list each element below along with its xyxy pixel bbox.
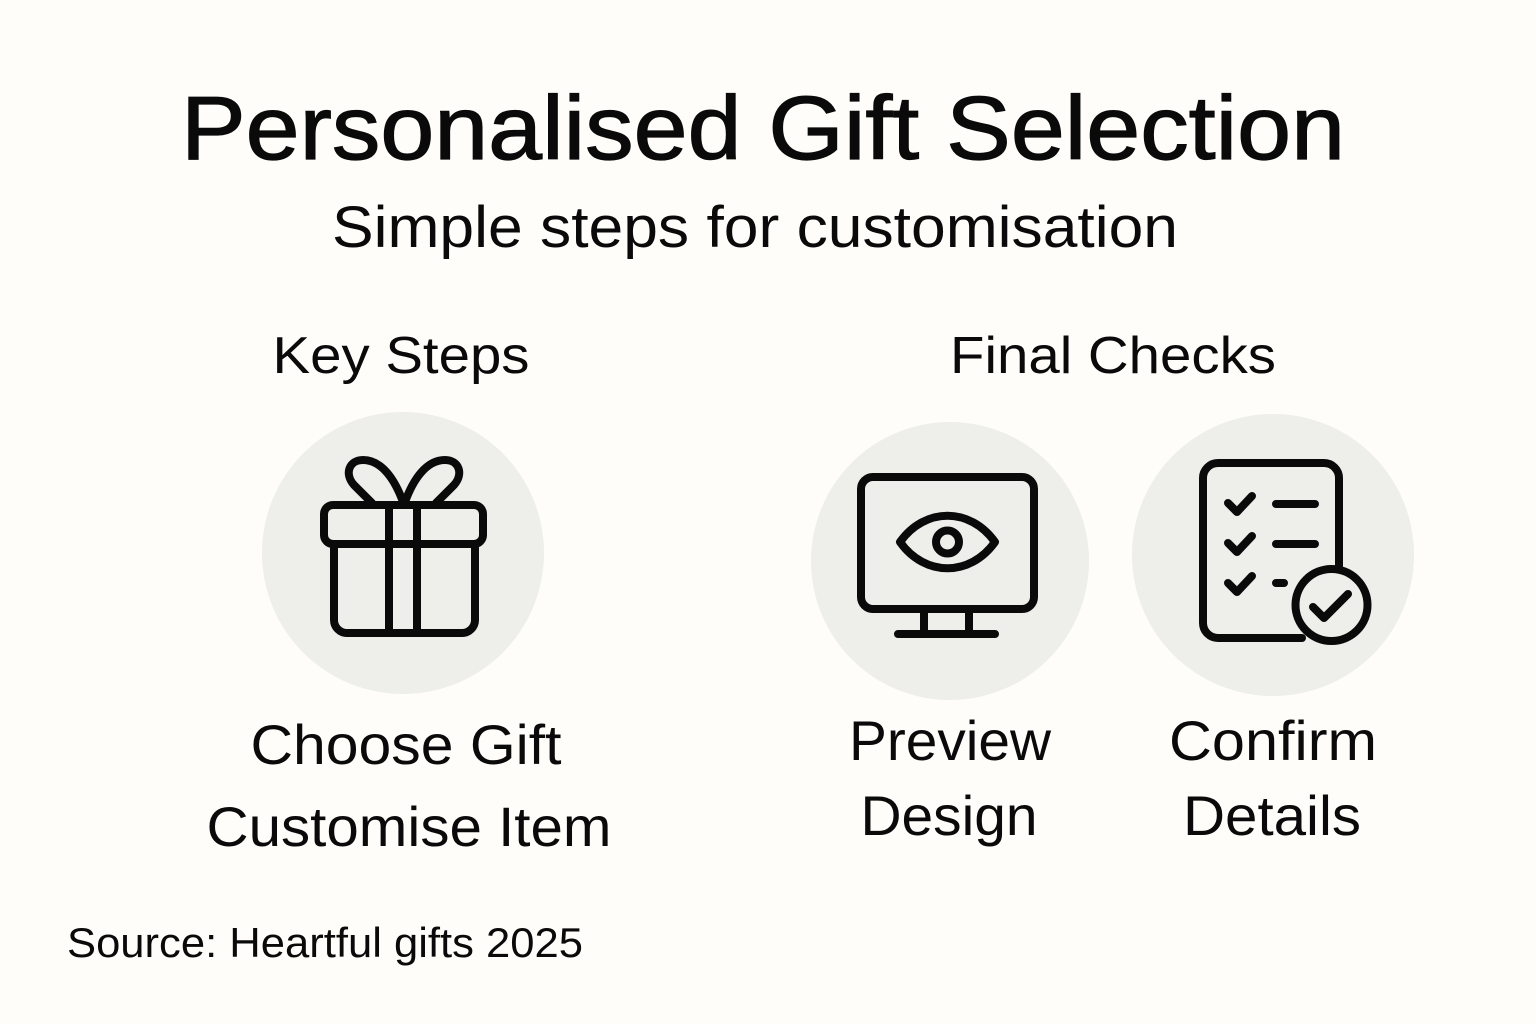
icon: gift <box>262 412 544 694</box>
label: confirm details: Details <box>1183 784 1361 847</box>
icon: checklist <box>1132 414 1414 696</box>
icon: preview monitor <box>811 422 1089 700</box>
subtitle: Simple steps for customisation <box>332 195 1178 260</box>
label: choose gift, customise item: Choose Gift <box>250 713 562 776</box>
source note: Source: Heartful gifts 2025 <box>67 919 583 966</box>
heading: key steps: Key Steps <box>272 327 530 385</box>
heading: final checks: Final Checks <box>950 327 1276 385</box>
label: preview design: Preview <box>849 709 1052 772</box>
label: confirm details: Confirm <box>1169 709 1377 772</box>
label: confirm details <box>1169 709 1377 847</box>
label: choose gift, customise item <box>206 713 612 858</box>
label: choose gift, customise item: Customise Item <box>206 795 612 858</box>
label: preview design <box>849 709 1052 847</box>
label: preview design: Design <box>860 784 1038 847</box>
title: Personalised Gift Selection <box>181 79 1345 179</box>
